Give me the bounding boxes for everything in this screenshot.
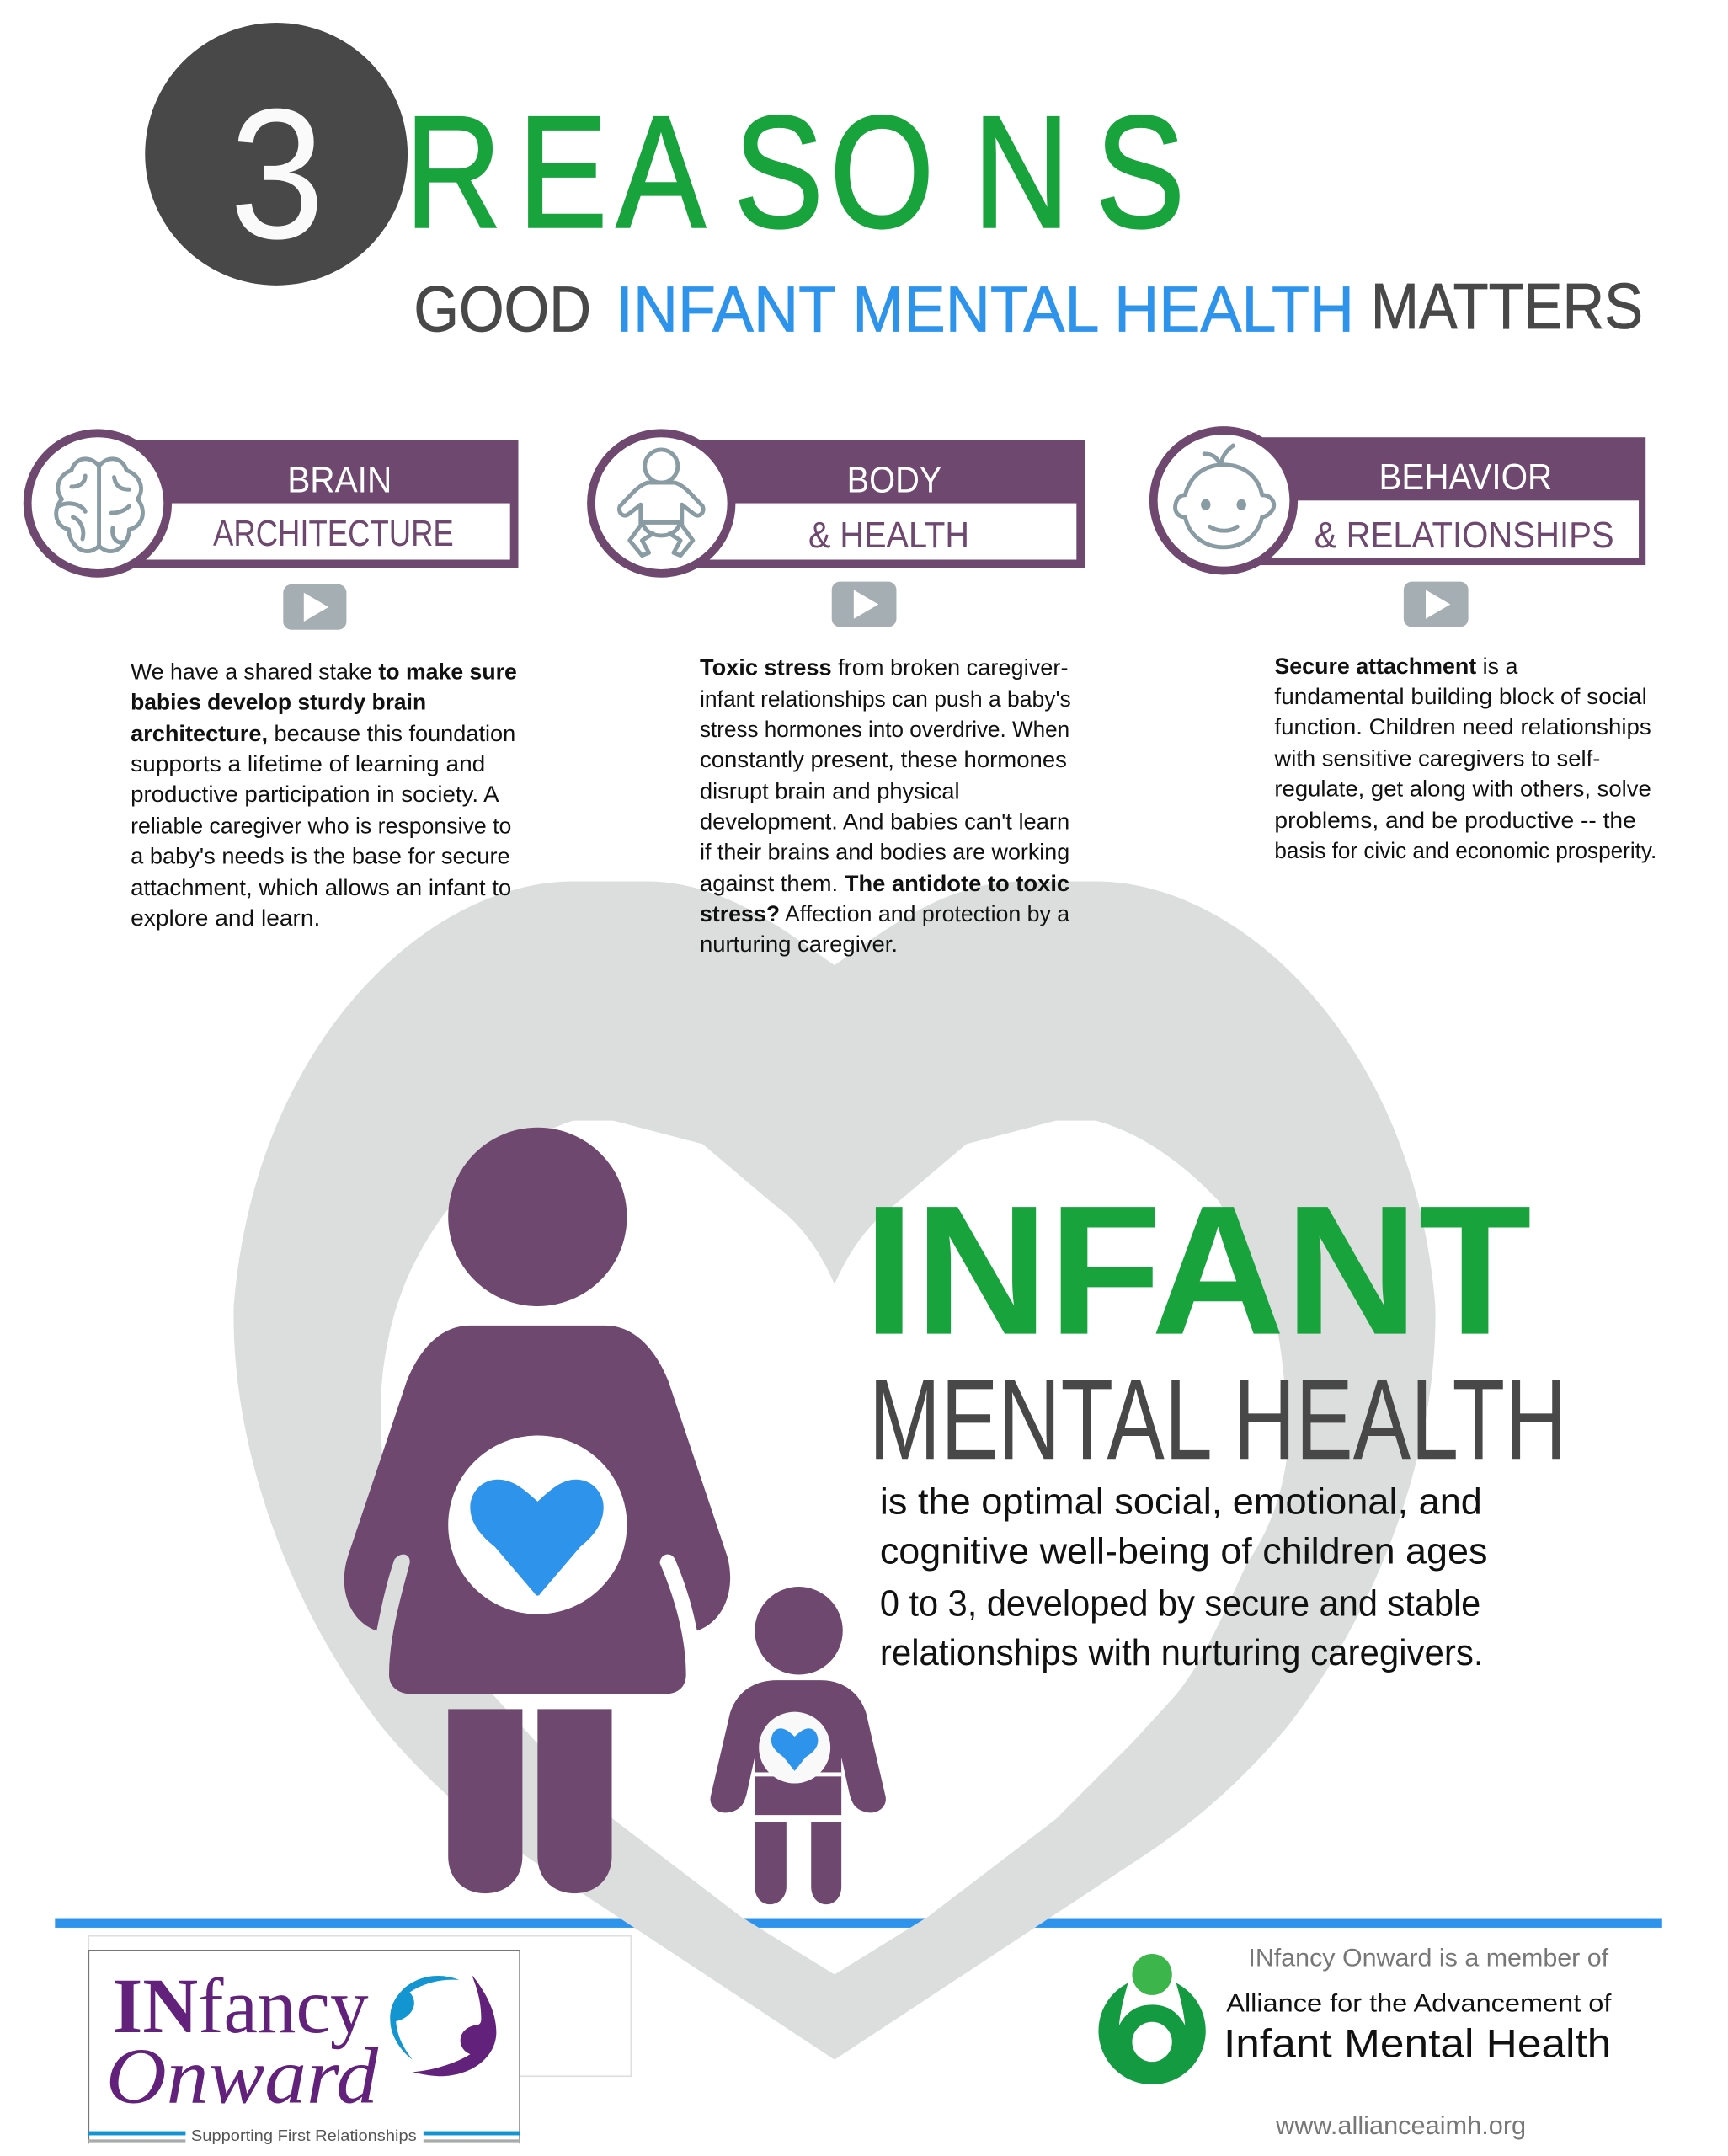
text block: body and health: disrupt brain and physical	[700, 778, 960, 804]
text block: body and health: if their brains and bodies are working	[700, 838, 1069, 864]
text block: behavior and relationships: Secure attachment is a	[1274, 653, 1518, 679]
logo: alliance for the advancement of infant mental health: Alliance for the Advancement of	[1226, 1990, 1612, 2018]
icon: baby	[619, 450, 703, 556]
text block: behavior and relationships: fundamental building block of social	[1274, 683, 1647, 709]
panel: body and health header: BODY	[847, 461, 941, 501]
subtitle	[413, 271, 1643, 346]
text block: brain architecture: architecture, because this foundation	[131, 720, 515, 746]
panel: behavior and relationships header: & RELATIONSHIPS	[1315, 515, 1614, 556]
text block: body and health: against them. The antidote to toxic	[700, 870, 1069, 896]
subtitle: GOOD	[413, 275, 591, 346]
logo: infancy onward: INfancy	[113, 1963, 369, 2050]
logo: alliance for the advancement of infant mental health: Infant Mental Health	[1224, 2021, 1611, 2066]
text block: behavior and relationships: function. Children need relationships	[1274, 713, 1651, 739]
text block: brain architecture: productive participation in society. A	[131, 781, 500, 807]
logo: alliance for the advancement of infant mental health	[1098, 1954, 1612, 2084]
text block: brain architecture: We have a shared stake to make sure	[131, 659, 517, 685]
text block: brain architecture: attachment, which allows an infant to	[131, 874, 511, 900]
text block: behavior and relationships: basis for civic and economic prosperity.	[1274, 837, 1656, 863]
icon: play button behavior	[1404, 582, 1469, 627]
panel: brain architecture header: BRAIN	[287, 461, 392, 501]
icon: play button brain	[283, 584, 346, 630]
text block: brain architecture: a baby's needs is the base for secure	[131, 842, 510, 868]
text block: brain architecture: explore and learn.	[131, 905, 320, 931]
text block: body and health: infant relationships can push a baby's	[700, 686, 1071, 712]
text block: body and health: development. And babies can't learn	[700, 808, 1069, 835]
text block: brain architecture: reliable caregiver who is responsive to	[131, 812, 511, 838]
text block: brain architecture: supports a lifetime of learning and	[131, 750, 485, 776]
title: reasons: REASONS	[405, 83, 1185, 262]
text block: definition: cognitive well-being of children ages	[880, 1531, 1487, 1572]
logo: infancy onward	[88, 1936, 631, 2144]
icon: baby face	[1176, 446, 1274, 547]
text block: body and health: constantly present, these hormones	[700, 746, 1067, 772]
panel: body and health header	[591, 433, 1085, 574]
text block: body and health: stress hormones into overdrive. When	[700, 716, 1069, 742]
text block: behavior and relationships: problems, and be productive -- the	[1274, 807, 1636, 833]
number badge	[145, 23, 408, 286]
text block: behavior and relationships: with sensitive caregivers to self-	[1273, 744, 1600, 771]
icon: brain	[56, 459, 142, 552]
panel: body and health header: & HEALTH	[808, 515, 969, 556]
caption: website: www.allianceaimh.org	[1275, 2112, 1526, 2140]
panel: brain architecture header: ARCHITECTURE	[213, 514, 454, 554]
text block: definition: relationships with nurturing caregivers.	[880, 1633, 1484, 1673]
text block: body and health	[700, 654, 1071, 957]
panel: behavior and relationships header: BEHAVIOR	[1379, 457, 1552, 498]
figure: child	[711, 1587, 886, 1904]
heart background	[233, 882, 1436, 2060]
text block: behavior and relationships: regulate, get along with others, solve	[1274, 775, 1651, 801]
icon: play button body	[832, 582, 896, 627]
panel: brain architecture header	[28, 433, 518, 574]
text block: behavior and relationships	[1273, 653, 1656, 863]
text block: body and health: stress? Affection and protection by a	[700, 900, 1070, 926]
caption: membership: INfancy Onward is a member of	[1248, 1945, 1609, 1972]
heading: infant: INFANT	[863, 1168, 1532, 1374]
text block: brain architecture	[131, 659, 517, 931]
text block: definition	[880, 1482, 1487, 1673]
subtitle: INFANT MENTAL HEALTH	[616, 275, 1354, 346]
text block: body and health: nurturing caregiver.	[700, 931, 898, 957]
text block: definition: 0 to 3, developed by secure and stable	[880, 1583, 1480, 1624]
logo: infancy onward: Onward	[106, 2032, 379, 2120]
subtitle: MATTERS	[1371, 271, 1643, 343]
text block: definition: is the optimal social, emotional, and	[880, 1482, 1482, 1523]
logo: infancy onward: Supporting First Relationships	[191, 2127, 417, 2144]
panel: behavior and relationships header	[1154, 430, 1645, 571]
text block: brain architecture: babies develop sturdy brain	[131, 688, 426, 714]
number badge: 3	[230, 70, 324, 277]
text block: body and health: Toxic stress from broken caregiver-	[700, 654, 1069, 680]
figure: mother	[344, 1128, 730, 1893]
bottom rule	[55, 1919, 1662, 1928]
